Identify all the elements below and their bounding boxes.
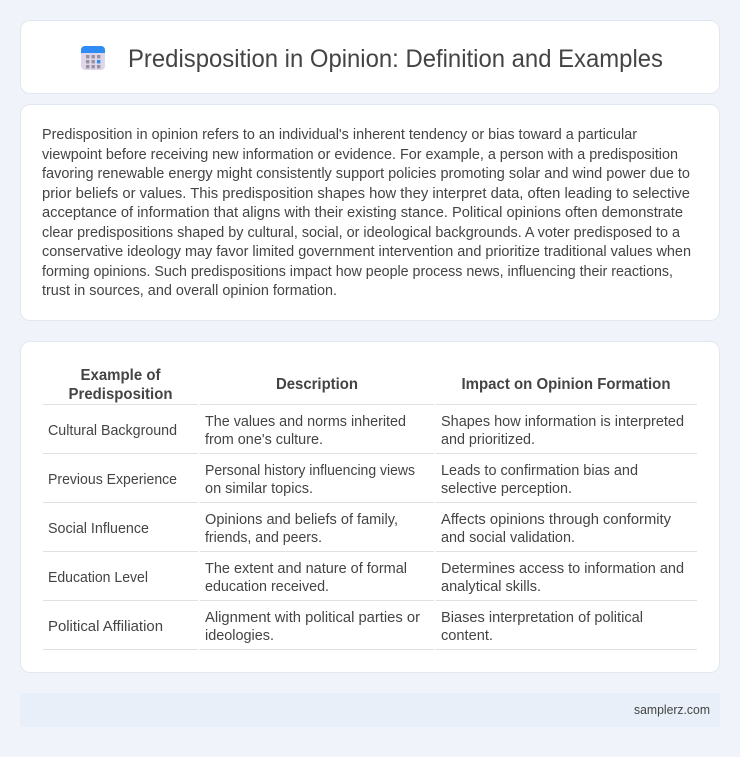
table header: Impact on Opinion Formation: [462, 376, 670, 393]
intro paragraph: conservative ideology may favor limited government intervention and prioritize traditional values when: [42, 244, 691, 260]
intro paragraph: Predisposition in opinion refers to an individual's inherent tendency or bias toward a particular: [42, 127, 637, 143]
intro paragraph: acceptance of information that aligns with their existing stance. Political opinions often demonstrate: [42, 205, 683, 221]
table: [43, 367, 697, 650]
row: education level: Determines access to information and: [441, 561, 684, 577]
row: social influence: [48, 512, 672, 546]
header panel: [20, 20, 720, 94]
intro paragraph: forming opinions. Such predispositions impact how people process news, influencing their reactions,: [42, 264, 673, 280]
footer text: samplerz.com: [634, 703, 710, 717]
row: previous experience: Previous Experience: [48, 472, 177, 488]
intro paragraph: trust in sources, and overall opinion formation.: [42, 283, 337, 299]
row: education level: analytical skills.: [441, 579, 541, 595]
row: political affiliation: Political Affiliation: [48, 619, 163, 635]
row: cultural background: Cultural Background: [48, 423, 177, 439]
row: social influence: Affects opinions through conformity: [441, 512, 672, 528]
table header: Predisposition: [68, 386, 172, 403]
intro panel: [20, 104, 720, 321]
table header: [68, 367, 670, 403]
row: education level: Education Level: [48, 570, 148, 586]
row: cultural background: and prioritized.: [441, 432, 535, 448]
table rules: [43, 404, 697, 650]
row: previous experience: [48, 463, 638, 497]
table header: Example of: [80, 367, 161, 384]
row: political affiliation: Biases interpretation of political: [441, 610, 643, 626]
row: cultural background: from one's culture.: [205, 432, 323, 448]
row: previous experience: selective perception.: [441, 481, 572, 497]
row: political affiliation: content.: [441, 628, 493, 644]
intro paragraph: clear predispositions shaped by cultural, social, or ideological backgrounds. A voter predisposed to a: [42, 225, 680, 241]
intro paragraph: prior beliefs or values. This predisposition shapes how they interpret data, often leading to selective: [42, 186, 690, 202]
row: education level: The extent and nature of formal: [205, 561, 407, 577]
table header: Description: [276, 376, 358, 393]
row: previous experience: on similar topics.: [205, 481, 313, 497]
intro paragraph: viewpoint before receiving new information or evidence. For example, a person with a predisposition: [42, 147, 678, 163]
row: social influence: and social validation.: [441, 530, 575, 546]
row: social influence: Social Influence: [48, 521, 149, 537]
intro paragraph: favoring renewable energy might consistently support policies promoting solar and wind power due to: [42, 166, 690, 182]
row: political affiliation: Alignment with political parties or: [205, 610, 420, 626]
row: cultural background: [48, 414, 684, 448]
row: political affiliation: ideologies.: [205, 628, 274, 644]
row: cultural background: Shapes how information is interpreted: [441, 414, 684, 430]
row: social influence: friends, and peers.: [205, 530, 322, 546]
title: Predisposition in Opinion: Definition and Examples: [128, 45, 663, 73]
intro paragraph: [42, 127, 691, 299]
row: cultural background: The values and norms inherited: [205, 414, 406, 430]
table panel: [20, 341, 720, 673]
footer bar: [20, 693, 720, 727]
icon: calendar: [81, 46, 105, 70]
row: previous experience: Personal history influencing views: [205, 463, 415, 479]
row: political affiliation: [48, 610, 643, 644]
row: previous experience: Leads to confirmation bias and: [441, 463, 638, 479]
row: social influence: Opinions and beliefs of family,: [205, 512, 398, 528]
row: education level: education received.: [205, 579, 329, 595]
row: education level: [48, 561, 684, 595]
